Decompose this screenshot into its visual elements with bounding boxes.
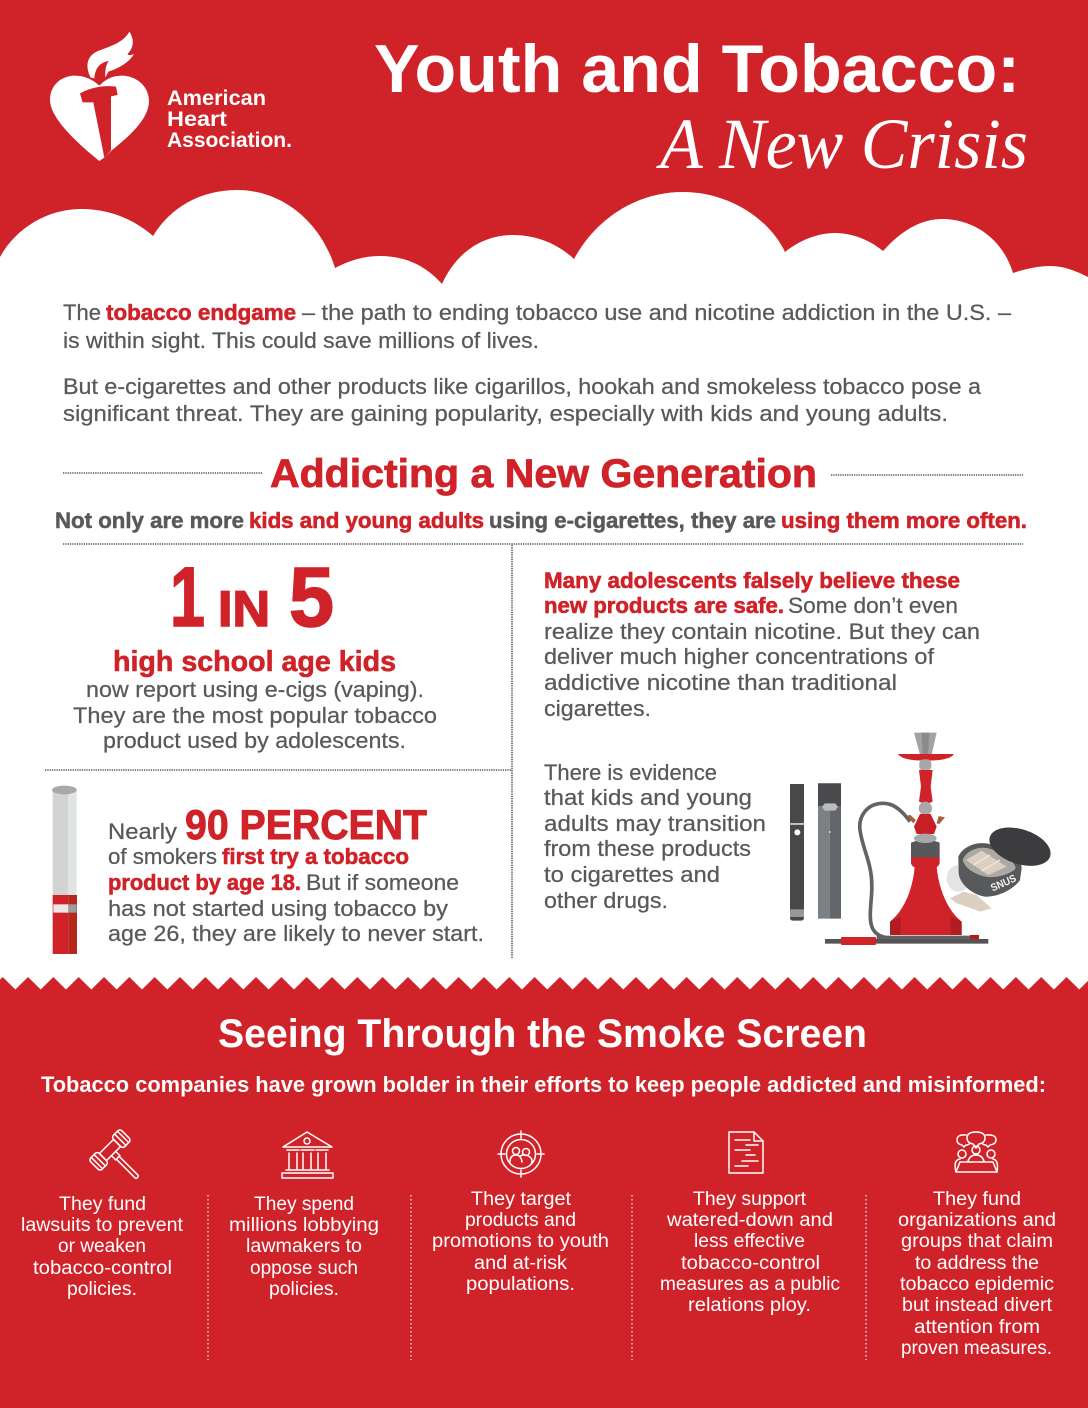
text: targeting: products and: [465, 1210, 576, 1231]
text: transition evidence: [544, 760, 766, 913]
header red banner with cloud edge: [0, 0, 1088, 284]
text: 90 percent: first try a tobacco: [222, 844, 409, 869]
text: watered-down measures: relations ploy.: [688, 1295, 811, 1316]
text: front groups: They fund: [933, 1189, 1021, 1210]
text: transition evidence: There is evidence: [544, 760, 717, 785]
text: transition evidence: adults may transition: [544, 811, 766, 836]
text: targeting: and at-risk: [474, 1253, 568, 1274]
text: transition evidence: from these products: [544, 836, 751, 861]
stat label: high school age kids: [113, 646, 396, 678]
icon: snus tin: [947, 820, 1055, 912]
text: front groups: groups that claim: [901, 1231, 1053, 1252]
heading: seeing through the smoke screen: Seeing Through the Smoke Screen: [218, 1012, 867, 1056]
subheading: using them more often.: [781, 508, 1027, 533]
stat: 1 in 5: 1: [170, 550, 205, 644]
subheading: tobacco companies: Tobacco companies have grown bolder in their efforts to keep people addicted and misinformed:: [41, 1072, 1046, 1097]
text: watered-down measures: less effective: [694, 1231, 805, 1252]
heading: addicting a new generation: Addicting a New Generation: [270, 452, 817, 496]
logo wordmark: Heart: [167, 108, 227, 131]
subheading: kids and young adults: [249, 508, 484, 533]
icon: pod vape: [818, 783, 841, 919]
text: false beliefs: deliver much higher concentrations of: [544, 644, 935, 669]
text: lawsuits: tobacco-control: [33, 1258, 172, 1279]
subheading: Not only are more: [55, 508, 244, 533]
text: watered-down measures: [660, 1189, 840, 1316]
intro text: But e-cigarettes and other products like cigarillos, hookah and smokeless tobacco pose a: [63, 374, 982, 399]
icon: heart and torch: [50, 32, 149, 161]
subtitle: A New Crisis: [656, 104, 1028, 184]
text: watered-down measures: They support: [693, 1189, 807, 1210]
logo: American Heart Association: [50, 32, 292, 161]
text: false beliefs: Many adolescents falsely believe these: [544, 568, 960, 593]
text: lawsuits: lawsuits to prevent: [21, 1215, 184, 1236]
text: front groups: proven measures.: [901, 1338, 1052, 1359]
stat description: [73, 677, 437, 753]
icon: target on people: [498, 1131, 544, 1177]
logo wordmark: American: [167, 87, 266, 110]
text: watered-down measures: measures as a public: [660, 1274, 840, 1295]
illustration: vapes, hookah and snus: [790, 733, 1055, 945]
text: transition evidence: to cigarettes and: [544, 862, 720, 887]
stat description: now report using e-cigs (vaping).: [86, 677, 424, 702]
icon: government building: [282, 1132, 333, 1178]
text: front groups: tobacco epidemic: [900, 1274, 1054, 1295]
icon: document: [729, 1132, 763, 1173]
intro text: – the path to ending tobacco use and nicotine addiction in the U.S. –: [302, 300, 1012, 325]
text: 90 percent: But if someone: [306, 870, 459, 895]
text: front groups: organizations and: [898, 1210, 1056, 1231]
text: lobbying: millions lobbying: [229, 1215, 379, 1236]
text: lawsuits: policies.: [67, 1279, 137, 1300]
stat description: product used by adolescents.: [103, 728, 406, 753]
intro text: tobacco endgame: [106, 300, 296, 325]
text: 90 percent: 90 PERCENT: [185, 801, 427, 848]
logo wordmark: Association.: [167, 129, 292, 152]
text: front groups: to address the: [915, 1253, 1039, 1274]
text: lawsuits: They fund: [59, 1194, 146, 1215]
text: lobbying: [229, 1194, 379, 1300]
icon: hookah: [825, 733, 988, 945]
text: lawsuits: or weaken: [58, 1236, 146, 1257]
intro text: is within sight. This could save millions of lives.: [63, 328, 539, 353]
icon: snus tin: SNUS: [989, 873, 1018, 894]
stat: 1 in 5: [170, 550, 334, 644]
stat description: They are the most popular tobacco: [73, 703, 437, 728]
text: false beliefs: [544, 568, 980, 721]
text: false beliefs: cigarettes.: [544, 696, 651, 721]
text: lobbying: policies.: [269, 1279, 339, 1300]
icon: vape pen: [790, 784, 804, 921]
text: front groups: [898, 1189, 1056, 1359]
text: targeting: [432, 1189, 609, 1295]
text: targeting: promotions to youth: [432, 1231, 609, 1252]
text: lawsuits: [21, 1194, 184, 1300]
stat: 1 in 5: 5: [289, 550, 334, 644]
text: false beliefs: Some don’t even: [788, 593, 958, 618]
text: watered-down measures: watered-down and: [666, 1210, 833, 1231]
text: false beliefs: realize they contain nicotine. But they can: [544, 619, 980, 644]
subheading: using e-cigarettes, they are: [489, 508, 776, 533]
intro text: The: [63, 300, 101, 325]
text: transition evidence: that kids and young: [544, 785, 752, 810]
text: front groups: but instead divert: [902, 1295, 1053, 1316]
icon: group meeting: [955, 1132, 998, 1172]
text: 90 percent: product by age 18.: [108, 870, 301, 895]
text: 90 percent: of smokers: [108, 844, 217, 869]
icon: cigarette: [52, 786, 77, 954]
text: 90 percent: Nearly: [108, 819, 177, 844]
text: 90 percent: age 26, they are likely to never start.: [108, 921, 484, 946]
text: lobbying: oppose such: [250, 1258, 358, 1279]
text: 90 percent: has not started using tobacco by: [108, 896, 448, 921]
text: false beliefs: new products are safe.: [544, 593, 784, 618]
subheading: [55, 508, 1027, 533]
text: transition evidence: other drugs.: [544, 888, 668, 913]
text: false beliefs: addictive nicotine than traditional: [544, 670, 897, 695]
text: lobbying: lawmakers to: [246, 1236, 362, 1257]
intro text: significant threat. They are gaining popularity, especially with kids and young adults.: [63, 401, 948, 426]
intro text: [63, 300, 1012, 426]
text: lobbying: They spend: [254, 1194, 354, 1215]
text: front groups: attention from: [914, 1317, 1040, 1338]
text: watered-down measures: tobacco-control: [681, 1253, 820, 1274]
logo wordmark: [167, 87, 292, 152]
panel: smoke screen: [0, 977, 1088, 1408]
text: targeting: They target: [471, 1189, 572, 1210]
text: targeting: populations.: [466, 1274, 575, 1295]
text: 90 percent: [108, 801, 484, 946]
icon: gavel: [89, 1129, 153, 1193]
stat: 1 in 5: IN: [218, 581, 270, 637]
title: Youth and Tobacco:: [374, 31, 1020, 107]
